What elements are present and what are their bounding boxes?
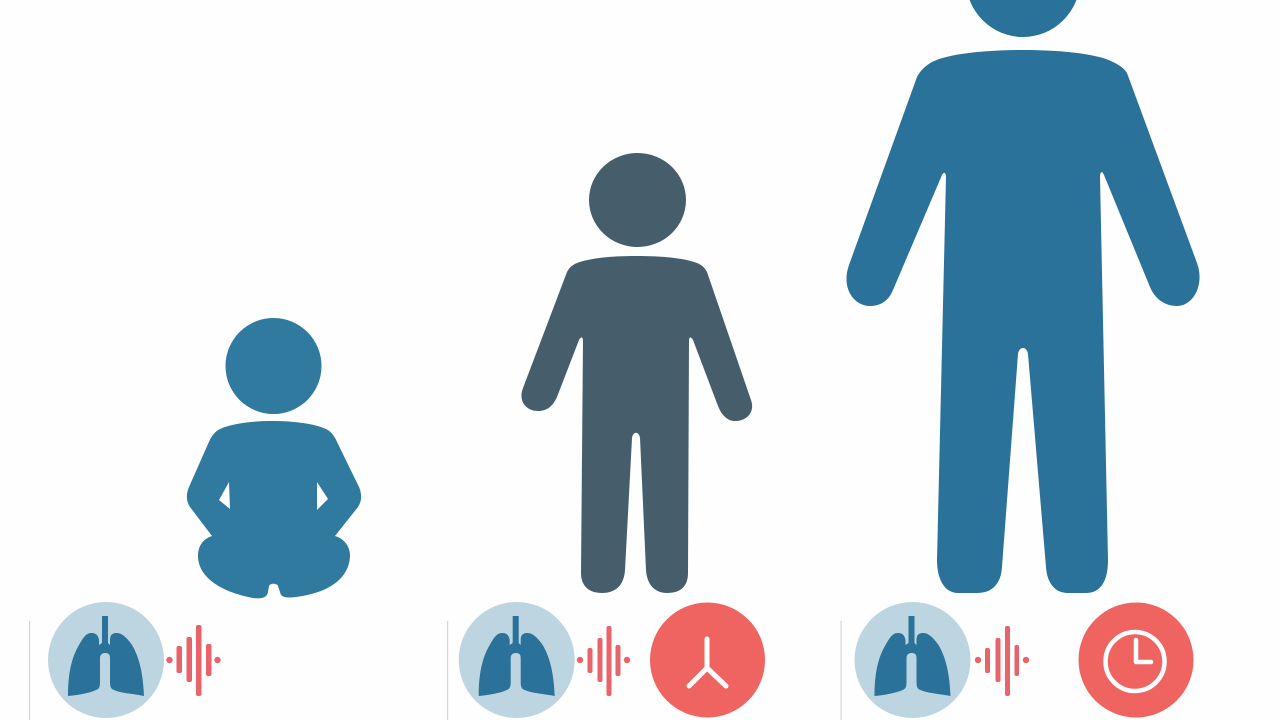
icon: lungs in circle, child (459, 602, 575, 718)
divider middle (447, 621, 448, 720)
divider left (29, 621, 30, 720)
icon: clock in red circle (1078, 602, 1194, 718)
icon: sound wave, adult (975, 626, 1029, 696)
icon: lungs in circle, adult (854, 602, 970, 718)
figure: seated infant (187, 318, 361, 598)
figure: adult standing (846, 0, 1200, 593)
divider right (840, 621, 842, 720)
icon: lungs in circle, infant (48, 602, 164, 718)
icon: airway branch in red circle (650, 602, 765, 718)
figure: child standing (521, 153, 752, 593)
icon: sound wave, child (577, 626, 630, 696)
icon: sound wave, infant (166, 625, 221, 696)
